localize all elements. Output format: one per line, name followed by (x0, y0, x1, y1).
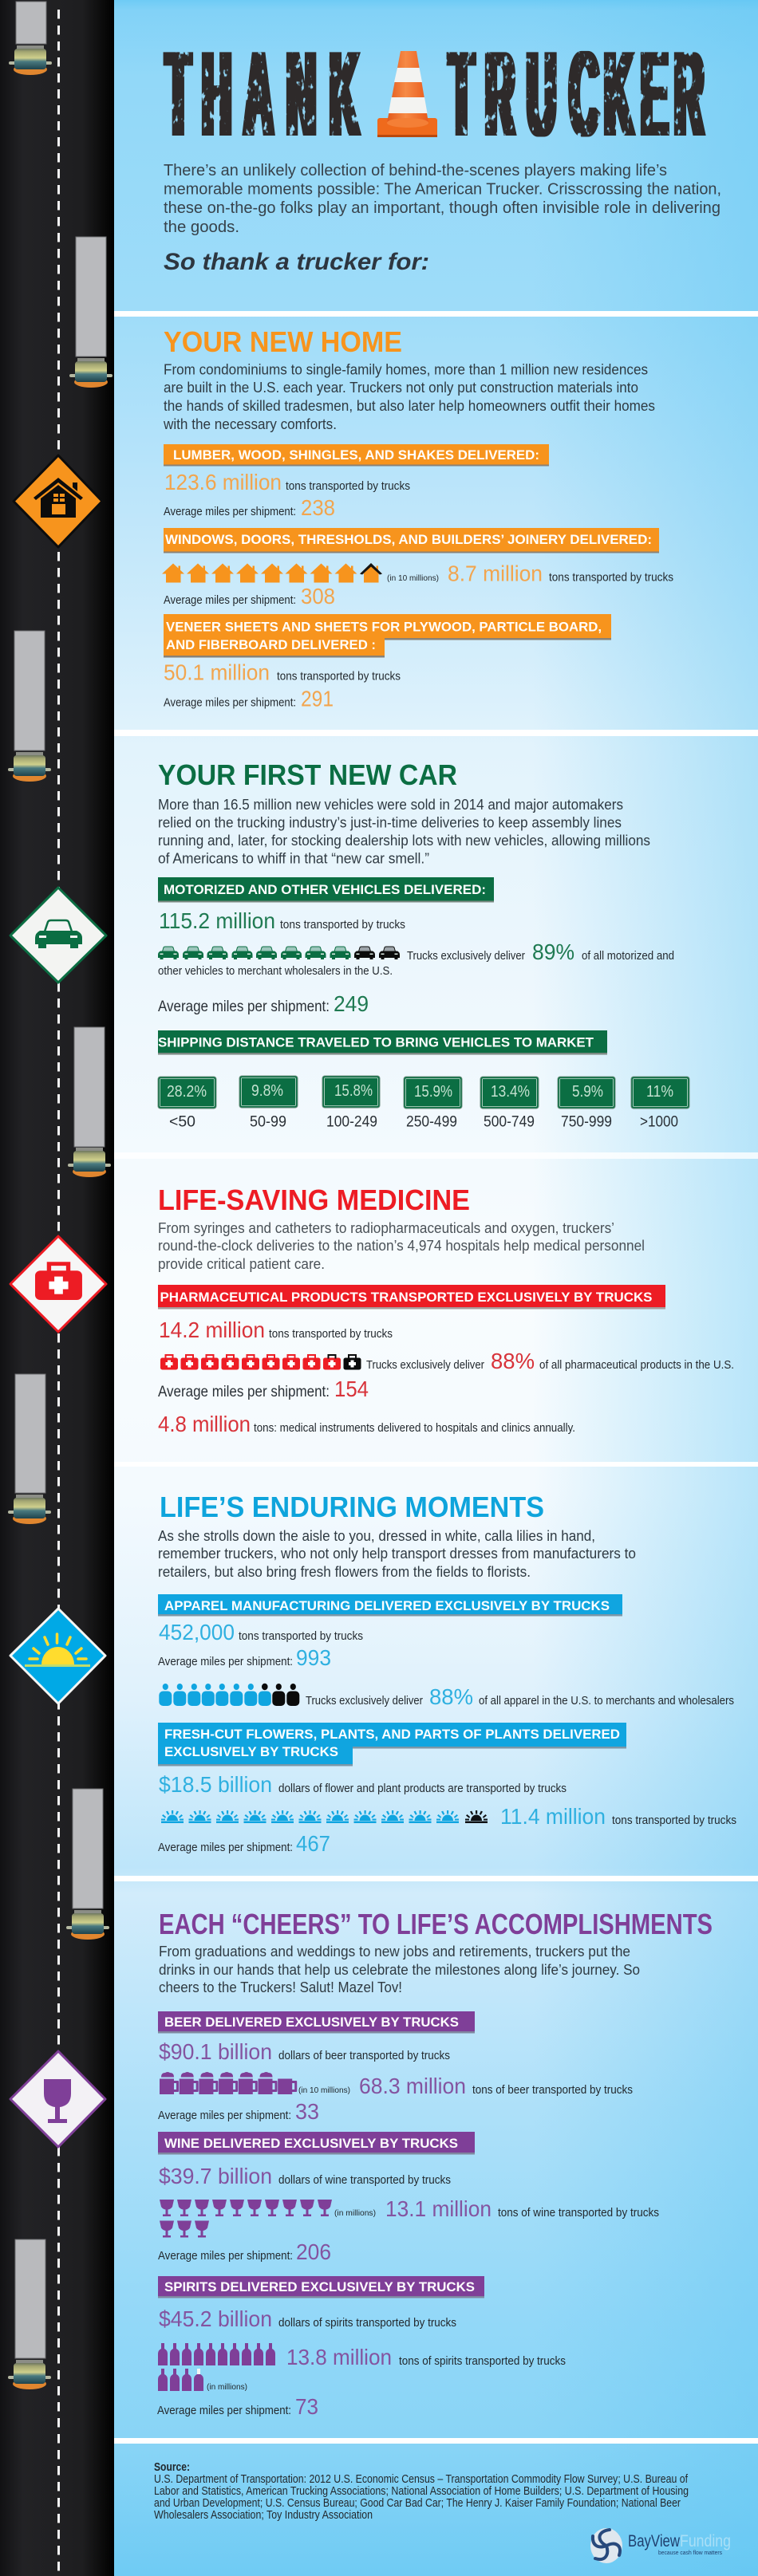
panel: your first new car (158, 758, 689, 1131)
stat: miles 993 (158, 1645, 331, 1670)
panel: each cheers to life's accomplishments (157, 1908, 713, 2419)
sign: under 50: 28.2% (167, 1083, 207, 1101)
stat: miles 238 (164, 495, 335, 520)
banner: beer: BEER DELIVERED EXCLUSIVELY BY TRUCKS (164, 2015, 459, 2030)
sign: under 50 (158, 1077, 216, 1131)
banner: apparel (158, 1594, 622, 1616)
stat: miles 308: 308 (301, 584, 335, 609)
truck 6 (66, 1789, 109, 1940)
body text (158, 1527, 636, 1580)
heading: YOUR NEW HOME (164, 325, 402, 358)
body text: running and, later, for stocking dealership lots with new vehicles, allowing millions (158, 832, 650, 849)
stat: 11.4 million: 11.4 million (500, 1804, 606, 1829)
sign: 500-749: 13.4% (491, 1083, 530, 1101)
stat: 45.2 billion: $45.2 billion (159, 2306, 272, 2331)
stat: miles 154 (158, 1377, 369, 1401)
sign: car (10, 888, 106, 983)
stat: miles 238: 238 (301, 495, 335, 520)
stat: 18.5 billion: $18.5 billion (159, 1772, 272, 1797)
body text: of Americans to whiff in that “new car smell.” (158, 850, 429, 866)
stat: 452,000 (159, 1620, 363, 1644)
source text: Wholesalers Association; Toy Industry Association (154, 2509, 373, 2522)
stat: 68.3 million (298, 2074, 633, 2098)
icon: traffic cone (377, 51, 437, 137)
stat: miles 33: Average miles per shipment: (158, 2109, 291, 2122)
stat: 11.4 million (500, 1804, 736, 1829)
stat: 123.6 million (164, 470, 410, 494)
stat: 13.8 million: tons of spirits transported by trucks (399, 2355, 566, 2368)
subheading: so thank a trucker for: So thank a trucker for: (164, 249, 429, 275)
body text (158, 796, 650, 866)
stat: 90.1 billion: $90.1 billion (159, 2039, 272, 2064)
stat: miles 249: 249 (334, 991, 369, 1016)
panel: life's enduring moments (158, 1491, 736, 1856)
logo: BayView Funding: BayView (628, 2532, 681, 2550)
stat: 13.1 million (334, 2196, 659, 2221)
stat: miles 993: Average miles per shipment: (158, 1655, 293, 1668)
banner: spirits (158, 2276, 484, 2298)
logo: BayView Funding (590, 2528, 731, 2563)
banner: windows (164, 528, 659, 553)
sign: 500-749 (480, 1077, 539, 1131)
icon row: suns (161, 1810, 488, 1823)
icon row: houses (162, 563, 382, 582)
sign: sunrise (10, 1609, 105, 1704)
sign: 250-499: 250-499 (406, 1113, 457, 1131)
icon: swirl (590, 2528, 622, 2563)
icon row: cars (158, 947, 400, 959)
body text: retailers, but also bring fresh flowers from the fields to florists. (158, 1563, 531, 1580)
truck 3 (8, 631, 51, 782)
sign: 500-749: 500-749 (484, 1113, 535, 1131)
stat: miles 308 (164, 584, 335, 609)
stat: 89 percent: other vehicles to merchant wholesalers in the U.S. (158, 965, 393, 978)
sign: wine glass (10, 2051, 105, 2147)
stat: 13.1 million: 13.1 million (385, 2196, 492, 2221)
stat: 11.4 million: tons transported by trucks (612, 1814, 736, 1827)
stat: 452,000: tons transported by trucks (239, 1630, 363, 1643)
sign: 250-499: 15.9% (414, 1083, 452, 1101)
stat: miles 308: Average miles per shipment: (164, 593, 296, 607)
banner: veneer: VENEER SHEETS AND SHEETS FOR PLYWOOD, PARTICLE BOARD, (166, 619, 602, 635)
body text: drinks in our hands that help us celebrate the milestones along life’s journey. So (159, 1961, 640, 1978)
stat: 123.6 million: 123.6 million (164, 470, 282, 494)
sign: house (14, 455, 102, 547)
stat: 50.1 million: tons transported by trucks (277, 670, 401, 683)
stat: 4.8 million: tons: medical instruments delivered to hospitals and clinics annually. (254, 1422, 575, 1435)
stat: miles 291: 291 (301, 686, 334, 711)
sign: 50-99 (239, 1076, 298, 1131)
banner: shipping distance (158, 1030, 607, 1054)
intro text: There’s an unlikely collection of behind-the-scenes players making life’s (164, 162, 667, 179)
stat: 39.7 billion: $39.7 billion (159, 2164, 272, 2188)
title word: TRUCKER: TRUCKER (449, 26, 704, 161)
banner: shipping distance: SHIPPING DISTANCE TRAVELED TO BRING VEHICLES TO MARKET (158, 1035, 594, 1050)
sign: under 50: <50 (169, 1113, 195, 1131)
stat: 45.2 billion (159, 2306, 456, 2331)
stat: miles 33: 33 (295, 2099, 319, 2124)
body text: the hands of skilled tradesmen, but also later help homeowners outfit their homes (164, 397, 655, 414)
stat: miles 73: Average miles per shipment: (157, 2404, 291, 2417)
body text (158, 1219, 645, 1272)
sign: 100-249 (322, 1076, 380, 1131)
stat: 89 percent: Trucks exclusively deliver (407, 950, 525, 963)
stat: 50.1 million (164, 660, 401, 684)
source (154, 2461, 689, 2522)
sign: 100-249: 15.8% (334, 1082, 373, 1100)
title word: THANK: THANK (166, 26, 359, 161)
stat: miles 206 (158, 2239, 331, 2264)
stat: 68.3 million: (in 10 millions) (298, 2086, 350, 2095)
heading: LIFE’S ENDURING MOMENTS (160, 1491, 544, 1523)
intro text (164, 162, 721, 236)
stat: 89 percent: of all motorized and (582, 950, 674, 963)
panel: your new home (162, 325, 673, 711)
icon row: medical kits (160, 1355, 361, 1370)
stat: miles 993: 993 (296, 1645, 331, 1670)
banner: motorized (158, 877, 494, 903)
stat: 8.7 million: tons transported by trucks (549, 571, 673, 584)
banner: wine: WINE DELIVERED EXCLUSIVELY BY TRUCKS (164, 2136, 458, 2151)
stat: 14.2 million (159, 1318, 393, 1342)
banner: lumber (164, 444, 549, 466)
banner: windows: WINDOWS, DOORS, THRESHOLDS, AND BUILDERS’ JOINERY DELIVERED: (165, 532, 652, 547)
panel: life-saving medicine (158, 1184, 734, 1436)
stat: 88 percent: of all pharmaceutical products in the U.S. (539, 1359, 734, 1372)
stat: miles 33 (158, 2099, 319, 2124)
stat: miles 73 (157, 2394, 318, 2419)
truck 1 (9, 2, 52, 75)
banner: lumber: LUMBER, WOOD, SHINGLES, AND SHAKES DELIVERED: (173, 447, 539, 463)
stat: 88 percent apparel (306, 1684, 734, 1709)
sign: 750-999: 750-999 (561, 1113, 612, 1131)
body text: As she strolls down the aisle to you, dressed in white, calla lilies in hand, (158, 1527, 595, 1544)
stat: 123.6 million: tons transported by trucks (286, 480, 410, 493)
sign: medical kit (10, 1236, 106, 1332)
intro text: the goods. (164, 219, 239, 236)
body text (159, 1943, 640, 1995)
sign: over 1000: 11% (646, 1083, 673, 1101)
icon rows: bottles (158, 2343, 275, 2391)
stat: 88 percent apparel: 88% (429, 1684, 473, 1709)
stat: 4.8 million (158, 1412, 575, 1436)
stat: 13.8 million (207, 2345, 566, 2392)
body text (163, 360, 655, 432)
stat: miles 206: Average miles per shipment: (158, 2249, 293, 2263)
stat: 8.7 million: (in 10 millions) (387, 573, 439, 583)
stat: 452,000: 452,000 (159, 1620, 235, 1644)
sign: 750-999 (558, 1077, 615, 1131)
sign: 750-999: 5.9% (572, 1083, 603, 1101)
body text: provide critical patient care. (158, 1255, 325, 1272)
stat: miles 467: Average miles per shipment: (158, 1841, 293, 1854)
banner: flowers: EXCLUSIVELY BY TRUCKS (164, 1744, 338, 1759)
stat: 115.2 million: tons transported by trucks (280, 919, 405, 932)
body text: More than 16.5 million new vehicles were sold in 2014 and major automakers (158, 796, 623, 813)
icon rows: wine glasses (160, 2200, 332, 2238)
stat: 88 percent apparel: Trucks exclusively deliver (306, 1695, 423, 1707)
truck 4 (68, 1027, 111, 1177)
stat: 115.2 million: 115.2 million (159, 908, 275, 933)
banner: flowers: FRESH-CUT FLOWERS, PLANTS, AND PARTS OF PLANTS DELIVERED (164, 1727, 620, 1742)
truck 7 (8, 2239, 51, 2389)
stat: miles 238: Average miles per shipment: (164, 505, 296, 518)
stat: 8.7 million (387, 561, 673, 585)
truck 5 (8, 1374, 51, 1524)
logo: BayView Funding: because cash flow matters (658, 2550, 722, 2556)
stat: miles 73: 73 (295, 2394, 318, 2419)
logo: BayView Funding: Funding (680, 2532, 731, 2550)
source text (154, 2473, 689, 2522)
stat: 8.7 million: 8.7 million (448, 561, 543, 585)
sign: 50-99: 50-99 (250, 1113, 286, 1131)
body text: From syringes and catheters to radiopharmaceuticals and oxygen, truckers’ (158, 1219, 614, 1236)
stat: 90.1 billion: dollars of beer transported by trucks (278, 2050, 450, 2062)
stat: 4.8 million: 4.8 million (158, 1412, 251, 1436)
heading: YOUR FIRST NEW CAR (158, 758, 457, 791)
title: Thank a Trucker (166, 26, 704, 161)
sign: 100-249: 100-249 (326, 1113, 377, 1131)
stat: 14.2 million: tons transported by trucks (269, 1328, 393, 1341)
icon row: people (159, 1684, 299, 1706)
banner: pharmaceutical: PHARMACEUTICAL PRODUCTS TRANSPORTED EXCLUSIVELY BY TRUCKS (160, 1290, 653, 1305)
stat: 13.8 million: 13.8 million (286, 2345, 392, 2369)
stat: miles 154: 154 (334, 1377, 369, 1401)
intro text: memorable moments possible: The American Trucker. Crisscrossing the nation, (164, 180, 721, 198)
banner: veneer (164, 614, 611, 657)
banner: apparel: APPAREL MANUFACTURING DELIVERED EXCLUSIVELY BY TRUCKS (164, 1598, 610, 1613)
stat: 50.1 million: 50.1 million (164, 660, 270, 684)
road (0, 0, 114, 2576)
banner: flowers (158, 1723, 626, 1766)
body text: remember truckers, who not only help transport dresses from manufacturers to (158, 1545, 636, 1562)
body text: with the necessary comforts. (163, 416, 337, 432)
stat: miles 291 (164, 686, 334, 711)
body text: cheers to the Truckers! Salut! Mazel Tov! (159, 1979, 402, 1995)
stat: 39.7 billion: dollars of wine transported by trucks (278, 2174, 451, 2187)
stat: 88 percent (366, 1349, 734, 1373)
stat: 88 percent: Trucks exclusively deliver (366, 1359, 484, 1372)
stat: 13.8 million: (in millions) (207, 2382, 247, 2392)
stat: 18.5 billion (159, 1772, 567, 1797)
sign: over 1000: >1000 (640, 1113, 678, 1131)
stat: miles 154: Average miles per shipment: (158, 1383, 330, 1400)
stat: 39.7 billion (159, 2164, 451, 2188)
body text: From graduations and weddings to new jobs and retirements, truckers put the (159, 1943, 630, 1960)
body text: From condominiums to single-family homes, more than 1 million new residences (164, 360, 648, 378)
intro text: these on-the-go folks play an important, though often invisible role in delivering (164, 199, 720, 217)
stat: 115.2 million (159, 908, 405, 933)
stat: 68.3 million: 68.3 million (359, 2074, 466, 2098)
sign: 250-499 (404, 1077, 462, 1131)
banner: pharmaceutical (158, 1285, 665, 1310)
source heading: Source: (154, 2461, 190, 2474)
sign: 50-99: 9.8% (251, 1082, 283, 1100)
banner: motorized: MOTORIZED AND OTHER VEHICLES DELIVERED: (164, 882, 486, 897)
stat: 68.3 million: tons of beer transported by trucks (472, 2084, 633, 2097)
stat: miles 467 (158, 1831, 330, 1856)
sign: over 1000 (631, 1077, 689, 1131)
truck 2 (69, 237, 113, 388)
chart: shipping distance road signs (158, 1076, 689, 1131)
stat: miles 249: Average miles per shipment: (158, 998, 330, 1015)
stat: 89 percent (158, 939, 674, 978)
body text: round-the-clock deliveries to the nation’s 4,974 hospitals help medical personnel (158, 1237, 645, 1254)
banner: veneer: AND FIBERBOARD DELIVERED : (166, 637, 376, 652)
stat: 90.1 billion (159, 2039, 450, 2064)
divider strips (114, 311, 758, 2444)
banner: wine (158, 2132, 475, 2155)
banner: beer (158, 2011, 475, 2034)
icon row: beer mugs (160, 2072, 297, 2094)
stat: miles 206: 206 (296, 2239, 331, 2264)
body text: are built in the U.S. each year. Truckers not only put construction materials into (164, 379, 638, 396)
stat: 88 percent: 88% (491, 1349, 535, 1373)
stat: 18.5 billion: dollars of flower and plant products are transported by trucks (278, 1782, 567, 1795)
stat: miles 467: 467 (296, 1831, 330, 1856)
stat: 45.2 billion: dollars of spirits transported by trucks (278, 2317, 456, 2330)
stat: 14.2 million: 14.2 million (159, 1318, 265, 1342)
stat: miles 291: Average miles per shipment: (164, 695, 296, 710)
stat: miles 249 (158, 991, 369, 1016)
stat: 13.1 million: (in millions) (334, 2208, 376, 2218)
stat: 13.1 million: tons of wine transported by trucks (498, 2207, 659, 2220)
stat: 88 percent apparel: of all apparel in the U.S. to merchants and wholesalers (479, 1695, 734, 1707)
stat: 89 percent: 89% (532, 939, 574, 964)
body text: relied on the trucking industry’s just-in-time deliveries to keep assembly lines (158, 813, 622, 831)
banner: spirits: SPIRITS DELIVERED EXCLUSIVELY BY TRUCKS (164, 2279, 475, 2294)
heading: LIFE-SAVING MEDICINE (158, 1184, 470, 1216)
